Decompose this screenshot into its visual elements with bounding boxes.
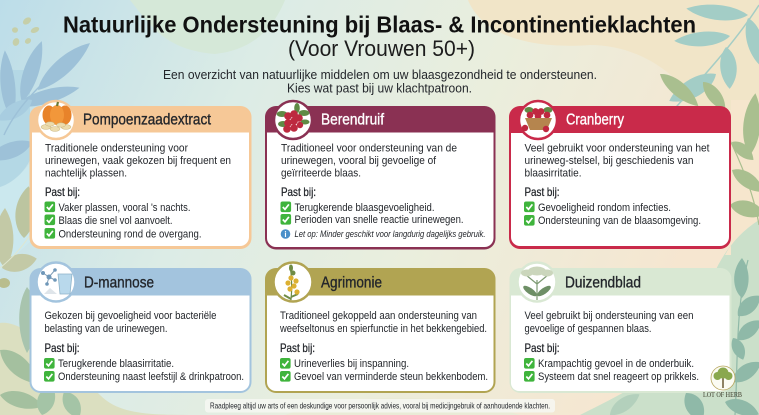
description: urineweg-stelsel, bij geschiedenis van	[524, 155, 694, 167]
leaves: bottom right	[606, 258, 759, 415]
past bij	[280, 342, 488, 383]
description: Traditioneel voor ondersteuning van de	[281, 142, 457, 154]
past bij: Gevoel van verminderde steun bekkenbodem.	[294, 371, 488, 383]
past bij: Gevoeligheid rondom infecties.	[538, 202, 671, 214]
note: i	[284, 230, 287, 239]
past bij: Terugkerende blaasgevoeligheid.	[294, 202, 434, 214]
icon: pumpkin	[37, 101, 75, 139]
icon: bearberry	[274, 101, 312, 139]
description: weefseltonus en spierfunctie in het bekkengebied.	[279, 323, 487, 335]
past bij	[524, 186, 701, 227]
past bij: Terugkerende blaasirritatie.	[58, 358, 174, 370]
panel: Agrimonie	[265, 262, 496, 393]
leaves: top right	[656, 2, 759, 225]
past bij	[44, 186, 202, 240]
description: belasting van de urinewegen.	[44, 323, 168, 335]
description	[524, 310, 694, 335]
logo: Lot of Herb	[703, 366, 742, 399]
past bij: Ondersteuning van de blaasomgeving.	[538, 215, 701, 227]
heading: Pompoenzaadextract	[83, 112, 211, 128]
description: blaasirritatie.	[524, 168, 582, 180]
decorative dots	[0, 16, 40, 288]
note: Let op: Minder geschikt voor langdurig dagelijks gebruik.	[294, 229, 486, 239]
footer note	[205, 399, 555, 412]
past bij: Ondersteuning rond de overgang.	[58, 228, 202, 240]
past bij	[524, 342, 699, 383]
description: urinewegen, vaak gekozen bij frequent en	[45, 155, 231, 167]
description	[281, 142, 457, 180]
past bij	[44, 342, 244, 383]
icon: yarrow	[518, 262, 556, 302]
description	[524, 142, 710, 180]
past bij: Vaker plassen, vooral 's nachts.	[58, 202, 190, 214]
subtitle: (Voor Vrouwen 50+)	[288, 36, 475, 61]
panel: Berendruif	[265, 101, 496, 250]
description: urinewegen, vooral bij gevoelige of	[281, 155, 437, 167]
description: nachtelijk plassen.	[45, 168, 127, 180]
heading: Agrimonie	[321, 274, 382, 292]
past bij: Past bij:	[45, 186, 80, 199]
past bij: Blaas die snel vol aanvoelt.	[58, 215, 172, 227]
description: Traditioneel gekoppeld aan ondersteuning van	[280, 310, 477, 322]
description	[44, 310, 216, 335]
description: Traditionele ondersteuning voor	[45, 142, 188, 154]
description	[279, 310, 487, 335]
past bij: Systeem dat snel reageert op prikkels.	[538, 371, 699, 383]
heading: Berendruif	[321, 112, 384, 128]
leaves: left side	[0, 185, 86, 415]
icon: cranberry bowl	[519, 101, 557, 139]
past bij: Ondersteuning naast leefstijl & drinkpatroon.	[58, 371, 244, 383]
description: Gekozen bij gevoeligheid voor bacteriële	[44, 310, 216, 322]
description: gevoelige of gespannen blaas.	[524, 323, 652, 335]
description: Veel gebruikt bij ondersteuning van een	[524, 310, 694, 322]
description: Veel gebruikt voor ondersteuning van het	[524, 142, 710, 154]
heading: Duizendblad	[565, 274, 641, 292]
description: geïrriteerde blaas.	[281, 168, 361, 180]
icon: molecule and glass	[36, 262, 76, 302]
heading: D-mannose	[84, 274, 154, 292]
past bij: Past bij:	[280, 342, 315, 355]
past bij	[280, 186, 464, 226]
logo: Lot of Herb: LOT OF HERB	[703, 392, 742, 399]
intro text: Een overzicht van natuurlijke middelen om uw blaasgezondheid te ondersteunen.	[163, 67, 597, 82]
past bij: Past bij:	[281, 186, 316, 199]
panel: Duizendblad	[510, 262, 732, 393]
panel: D-mannose	[30, 262, 252, 393]
past bij: Urineverlies bij inspanning.	[294, 358, 409, 370]
panel: Pompoenzaadextract	[30, 101, 252, 249]
panel: Cranberry	[509, 101, 731, 249]
description	[45, 142, 231, 180]
past bij: Perioden van snelle reactie urinewegen.	[294, 214, 464, 226]
title: Natuurlijke Ondersteuning bij Blaas- & Incontinentieklachten	[63, 12, 696, 38]
footer note: Raadpleeg altijd uw arts of een deskundige voor persoonlijk advies, vooral bij medicijngebruik of aanhoudende klachten.	[210, 402, 550, 410]
leaves: top left	[0, 37, 95, 166]
intro text	[163, 67, 597, 96]
heading: Cranberry	[566, 112, 624, 128]
past bij: Krampachtig gevoel in de onderbuik.	[538, 358, 694, 370]
past bij: Past bij:	[44, 342, 80, 355]
icon: agrimony flower	[274, 262, 312, 302]
intro text: Kies wat past bij uw klachtpatroon.	[287, 80, 472, 96]
past bij: Past bij:	[524, 186, 560, 199]
past bij: Past bij:	[524, 342, 560, 355]
